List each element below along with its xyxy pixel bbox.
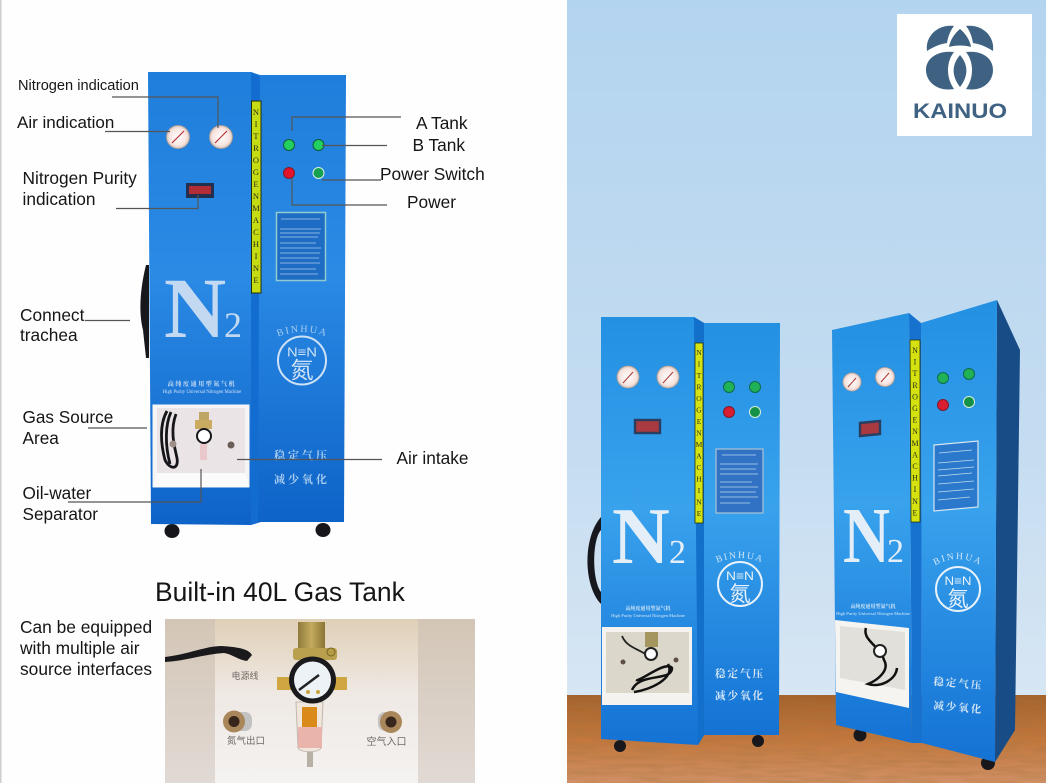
machine left in scene: 高纯度通用型氮气机 [625, 605, 671, 612]
machine caption: 高纯度通用型氮气机 [168, 380, 236, 388]
machine right in scene: High Purity Universal Nitrogen Machine [836, 611, 910, 616]
air inlet [378, 711, 402, 733]
slogan: 稳定气压 [274, 448, 330, 462]
photo panel: product scene [567, 0, 1046, 783]
photo: gas source detail [165, 619, 475, 783]
label: B Tank: B Tank [412, 135, 465, 155]
purity display [186, 183, 214, 198]
logo: KAINUO [897, 14, 1032, 136]
right cabinet panel [258, 75, 346, 522]
machine left in scene [587, 317, 780, 752]
text: air source interfaces: with multiple air [19, 638, 140, 658]
text: air source interfaces [19, 617, 152, 679]
name strip: NITROGENMACHINE [252, 107, 260, 285]
label: Oil-water Separator: Oil-water [22, 483, 92, 503]
machine left in scene: BINHUA [715, 552, 762, 563]
machine right in scene: N≡N [944, 574, 972, 588]
label: Gas Source Area: Gas Source [22, 407, 113, 427]
inner wall [165, 619, 475, 783]
label: Connect trachea [20, 305, 85, 345]
machine right in scene: 减少氧化 [933, 699, 984, 716]
left page background [0, 0, 567, 783]
slogan: 减少氧化 [274, 472, 330, 486]
brand logo: BINHUA [276, 325, 326, 336]
instruction plaque [276, 212, 326, 280]
brand logo [276, 325, 327, 386]
photo labels [227, 669, 406, 748]
N2 mark: N [164, 260, 226, 356]
regulator body [277, 622, 347, 767]
label: Connect trachea: Connect [20, 305, 85, 325]
nitrogen outlet [223, 710, 252, 732]
machine left in scene: N≡N [726, 569, 754, 583]
machine left in scene: NITROGENMACHINE [696, 348, 703, 518]
brand logo: N≡N [287, 344, 317, 360]
label: Air intake: Air intake [396, 448, 469, 468]
label: Power: Power [407, 192, 456, 212]
machine left in scene: 氮 [730, 583, 750, 606]
gas source window [152, 404, 250, 488]
label: A Tank: A Tank [416, 113, 468, 133]
machine caption [163, 380, 241, 395]
casters [164, 523, 330, 538]
slogan [274, 448, 330, 486]
label: Gas Source Area [22, 407, 113, 448]
label: Oil-water Separator: Separator [22, 504, 98, 524]
gauges [166, 125, 233, 149]
text: air source interfaces: Can be equipped [20, 617, 152, 637]
annotated machine [140, 72, 346, 538]
fold [251, 72, 261, 525]
machine right in scene: NITROGENMACHINE [911, 346, 919, 517]
machine left in scene: High Purity Universal Nitrogen Machine [611, 613, 685, 618]
text: air source interfaces: source interfaces [20, 659, 152, 679]
photo labels: 空气入口 [366, 733, 406, 748]
label: Connect trachea: trachea [20, 325, 78, 345]
machine right in scene: 稳定气压 [933, 675, 984, 692]
machine right in scene [832, 300, 1020, 770]
label: Nitrogen Purity indication: Nitrogen Purity [22, 168, 137, 188]
heading: Built-in 40L Gas Tank: Built-in 40L Gas Tank [155, 577, 406, 607]
wood floor [567, 695, 1046, 783]
power cable [165, 646, 252, 662]
machine caption: High Purity Universal Nitrogen Machine [163, 390, 241, 395]
label: Power Switch: Power Switch [380, 164, 485, 184]
machine right in scene: 高纯度通用型氮气机 [850, 603, 896, 610]
logo mark [926, 26, 993, 90]
machine right in scene: 2 [887, 533, 904, 570]
label: Nitrogen indication: Nitrogen indication [18, 78, 139, 94]
photo labels: 电源线 [231, 669, 259, 682]
machine left in scene: 2 [669, 534, 686, 571]
photo labels: 氮气出口 [227, 733, 265, 747]
logo: KAINUO: KAINUO [913, 100, 1007, 123]
label: Nitrogen Purity indication: indication [22, 189, 96, 209]
N2 mark: 2 [224, 305, 242, 345]
left cabinet panel [148, 72, 260, 525]
label: Gas Source Area: Area [22, 428, 59, 448]
machine right in scene: BINHUA [932, 552, 980, 566]
label: Oil-water Separator [22, 483, 98, 524]
hose [140, 265, 149, 358]
label: Air indication: Air indication [17, 113, 114, 132]
indicator lamps [284, 140, 324, 178]
machine right in scene: N [843, 493, 890, 580]
callout lines [68, 97, 401, 502]
machine left in scene: 稳定气压 [715, 667, 765, 680]
machine right in scene: 氮 [948, 588, 968, 611]
label: Nitrogen Purity indication [22, 168, 137, 209]
brand logo: 氮 [290, 357, 314, 383]
machine left in scene: 减少氧化 [715, 689, 765, 702]
machine left in scene: N [612, 493, 670, 581]
